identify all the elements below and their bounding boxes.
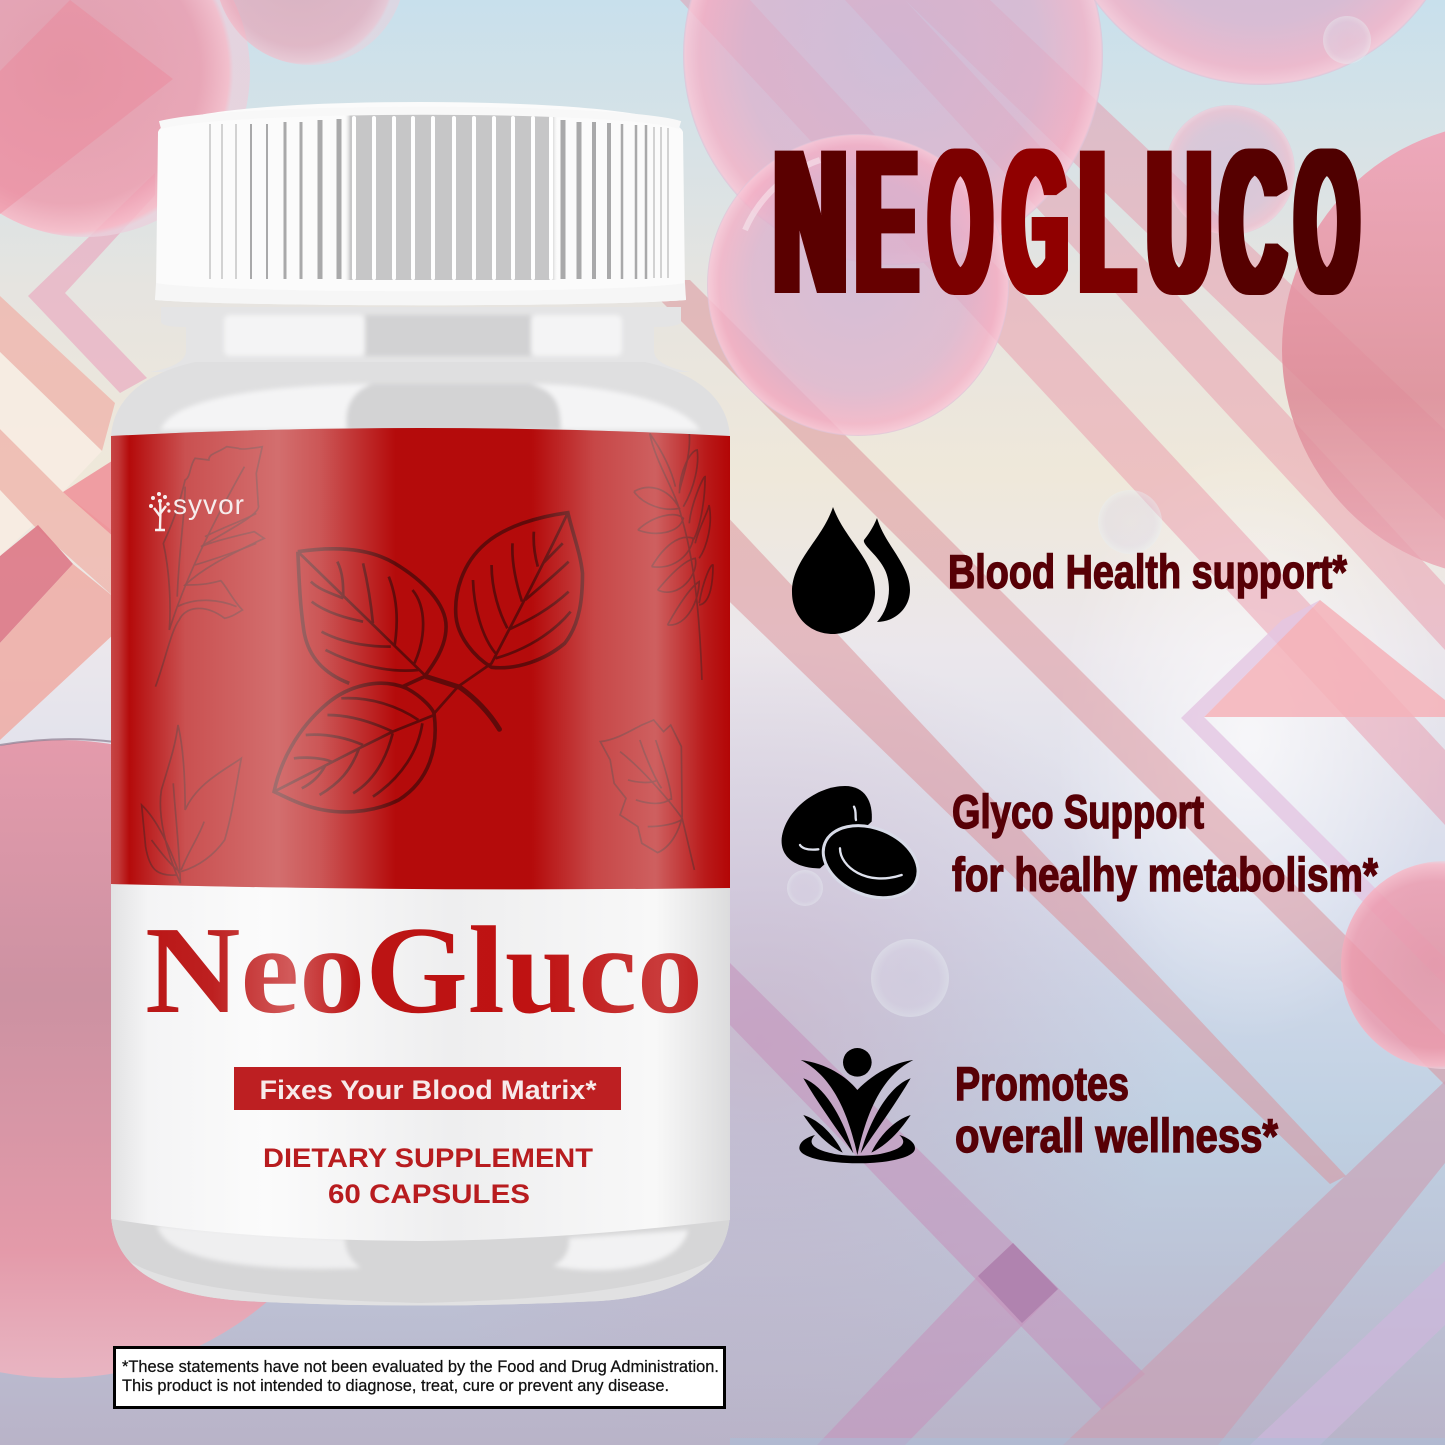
icon: wellness figure xyxy=(799,1048,915,1163)
title: C xyxy=(1221,108,1285,336)
product descriptor xyxy=(263,1143,594,1209)
lower diagonal bands xyxy=(730,963,1145,1445)
side leaves xyxy=(142,433,713,883)
bottle xyxy=(111,102,730,1315)
leaf line art xyxy=(142,433,713,883)
tagline banner xyxy=(234,1067,621,1110)
title: U xyxy=(1148,108,1210,336)
feature: blood health: Blood Health support* xyxy=(948,545,1348,598)
bottle body xyxy=(111,362,730,1306)
product descriptor: DIETARY SUPPLEMENT xyxy=(263,1143,594,1173)
bottle base shading xyxy=(111,1219,729,1306)
product descriptor: 60 CAPSULES xyxy=(328,1179,530,1209)
label: red upper xyxy=(111,428,730,889)
feature: wellness: overall wellness* xyxy=(955,1109,1279,1162)
title: O xyxy=(1296,108,1358,336)
title: E xyxy=(856,108,917,336)
icon: blood cells xyxy=(782,786,929,911)
title: G xyxy=(1004,108,1067,336)
title: O xyxy=(930,108,990,336)
feature: glyco support: Glyco Support xyxy=(952,785,1204,838)
label: white lower xyxy=(111,880,730,1241)
logo: syvor xyxy=(149,489,244,530)
cap xyxy=(155,102,686,305)
feature: wellness xyxy=(955,1057,1279,1162)
icon: blood drops xyxy=(792,507,910,634)
cap central shaded ribs xyxy=(344,110,558,280)
title: N xyxy=(774,108,846,336)
tagline banner: Fixes Your Blood Matrix* xyxy=(260,1075,597,1105)
disclaimer box: This product is not intended to diagnose, treat, cure or prevent any disease. xyxy=(122,1376,669,1395)
central leaves xyxy=(274,513,583,812)
disclaimer box xyxy=(114,1348,724,1408)
title xyxy=(774,108,1361,336)
right-hand diagonal bands xyxy=(680,0,1445,825)
label highlight sheen xyxy=(111,428,730,889)
logo: syvor: syvor xyxy=(173,489,244,520)
disclaimer box: *These statements have not been evaluated by the Food and Drug Administration. xyxy=(122,1357,719,1376)
brand name: NeoGluco xyxy=(145,902,703,1040)
bottle neck xyxy=(150,307,690,372)
feature: glyco support xyxy=(952,785,1379,901)
feature: wellness: Promotes xyxy=(955,1057,1129,1110)
left-hand chevrons and bands xyxy=(0,173,155,740)
pink triangle and outline xyxy=(1204,600,1445,717)
title: L xyxy=(1080,108,1134,336)
cap side grooves xyxy=(210,119,668,279)
